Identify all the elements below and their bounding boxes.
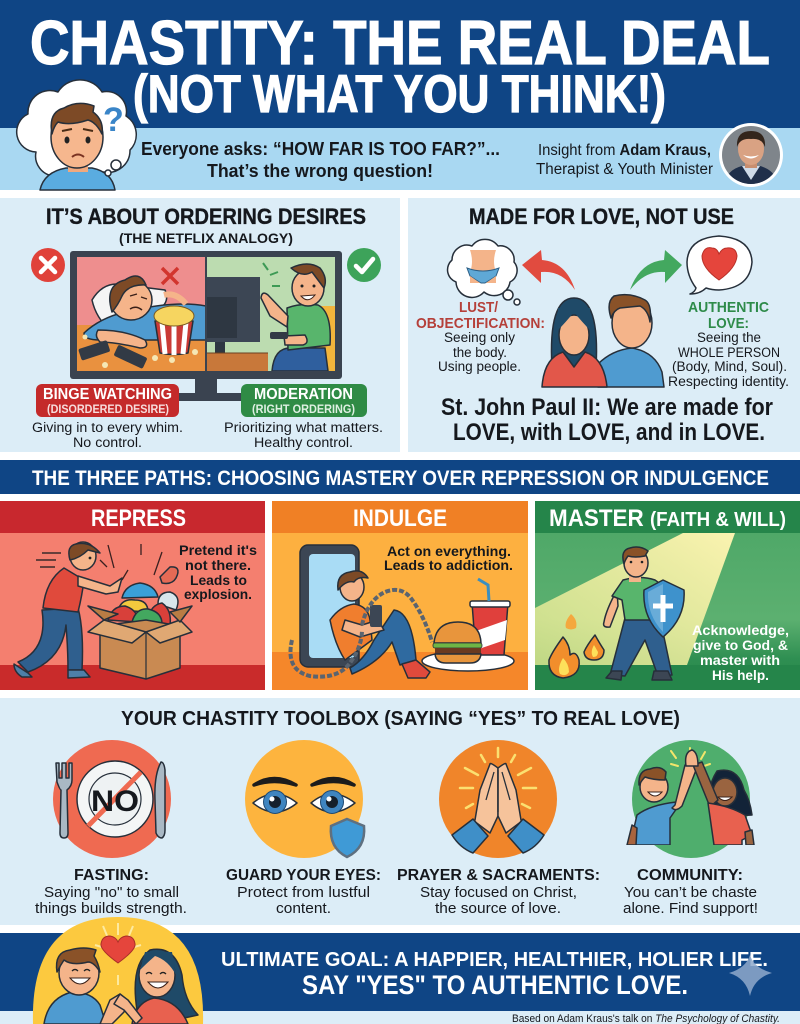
- icon: lust thought bubble: [448, 239, 520, 305]
- intro band: [0, 123, 800, 190]
- text: master caption: Acknowledge,: [692, 622, 789, 638]
- icon: no plate with fork and knife: NO: [91, 785, 139, 818]
- icon: eyes with shield: [245, 740, 364, 858]
- text: guard your eyes: [226, 867, 381, 917]
- text: fasting: [35, 867, 187, 917]
- text: repress caption: Leads to: [190, 572, 247, 588]
- arrow: toward love: [630, 250, 682, 290]
- icon: two friends high five: [627, 740, 754, 858]
- text: lust: [416, 299, 545, 374]
- speaker credit: Therapist & Youth Minister: [536, 161, 713, 178]
- binge watching scene: [77, 257, 206, 371]
- text: moderation caption: [224, 420, 383, 450]
- icon: love speech bubble: [687, 236, 752, 294]
- text: repress caption: Pretend it's: [179, 542, 257, 558]
- footer strip: [0, 1011, 800, 1024]
- panel: ordering desires: [0, 198, 400, 452]
- illustration: man with cross shield and flames: [549, 547, 684, 680]
- label: binge watching: BINGE WATCHING: [43, 386, 172, 403]
- text: prayer and sacraments: the source of love.: [435, 901, 561, 917]
- text: guard your eyes: GUARD YOUR EYES:: [226, 867, 381, 884]
- text: repress caption: not there.: [185, 557, 251, 573]
- text: guard your eyes: Protect from lustful: [237, 885, 370, 901]
- text: authentic love: WHOLE PERSON: [678, 345, 780, 360]
- banner: ultimate goal: [0, 933, 800, 1011]
- goal text: ULTIMATE GOAL: A HAPPIER, HEALTHIER, HOLIER LIFE.: [221, 949, 768, 971]
- text: fasting: things builds strength.: [35, 901, 187, 917]
- tool: prayer and sacraments: [397, 740, 600, 917]
- text: lust: LUST/: [459, 299, 499, 316]
- moderation scene: [206, 257, 335, 371]
- text: community: alone. Find support!: [623, 901, 758, 917]
- banner: three paths: [0, 460, 800, 494]
- icon: speaker portrait: [719, 123, 783, 187]
- text: repress caption: [179, 542, 257, 602]
- text: lust: Using people.: [438, 359, 521, 374]
- heading: made for love: MADE FOR LOVE, NOT USE: [469, 204, 734, 229]
- arrow: toward lust: [522, 250, 575, 290]
- tool: guard your eyes: [226, 740, 381, 917]
- text: prayer and sacraments: Stay focused on Christ,: [420, 885, 577, 901]
- speaker credit: Insight from Adam Kraus,: [538, 142, 711, 159]
- label: binge watching: [36, 384, 179, 417]
- text: fasting: FASTING:: [74, 867, 149, 884]
- label: moderation: (RIGHT ORDERING): [252, 404, 355, 416]
- text: indulge caption: [384, 543, 513, 573]
- text: binge caption: No control.: [73, 435, 142, 450]
- icon: red cross: [31, 248, 65, 282]
- panel: master: [535, 501, 800, 690]
- question text: Everyone asks: “HOW FAR IS TOO FAR?”...: [141, 139, 500, 159]
- text: community: [623, 867, 758, 917]
- text: master caption: give to God, &: [693, 637, 788, 653]
- speaker credit: [536, 142, 713, 178]
- text: binge caption: [32, 420, 183, 450]
- text: moderation caption: Prioritizing what matters.: [224, 420, 383, 435]
- text: prayer and sacraments: [397, 867, 600, 917]
- text: binge caption: Giving in to every whim.: [32, 420, 183, 435]
- text: community: COMMUNITY:: [637, 867, 743, 884]
- tool: fasting: [35, 740, 187, 917]
- text: community: You can’t be chaste: [624, 885, 757, 901]
- icon: green check: [347, 248, 381, 282]
- icon: confused boy in thought cloud: ?: [103, 101, 124, 139]
- label: moderation: [241, 384, 367, 417]
- question text: That’s the wrong question!: [207, 161, 433, 181]
- icon: no plate with fork and knife: [53, 740, 171, 858]
- text: lust: Seeing only: [444, 330, 515, 345]
- header banner: [0, 0, 800, 128]
- heading: master: MASTER (FAITH & WILL): [549, 505, 786, 532]
- text: master caption: His help.: [712, 667, 769, 683]
- label: binge watching: (DISORDERED DESIRE): [47, 404, 169, 416]
- panel: indulge: [272, 501, 528, 690]
- heading: indulge: INDULGE: [353, 505, 447, 532]
- text: authentic love: [668, 299, 789, 389]
- label: moderation: MODERATION: [254, 386, 353, 403]
- text: master caption: master with: [700, 652, 780, 668]
- text: indulge caption: Act on everything.: [387, 543, 511, 559]
- light beam: [535, 533, 735, 665]
- text: master caption: [692, 622, 789, 683]
- quote: [441, 394, 773, 446]
- subheading: netflix analogy: (THE NETFLIX ANALOGY): [119, 230, 293, 246]
- illustration: person forcing box shut: [14, 542, 192, 679]
- goal text: SAY "YES" TO AUTHENTIC LOVE.: [302, 970, 688, 1000]
- illustration: person chained to phone and junk food: [290, 545, 514, 678]
- title line 2: (NOT WHAT YOU THINK!): [133, 65, 666, 124]
- tool: community: [623, 740, 758, 917]
- heading: repress: REPRESS: [91, 505, 186, 532]
- text: authentic love: AUTHENTIC: [688, 299, 769, 316]
- text: authentic love: LOVE:: [708, 315, 749, 332]
- illustration: happy couple holding hands: [33, 917, 203, 1024]
- text: lust: the body.: [453, 345, 507, 360]
- text: indulge caption: Leads to addiction.: [384, 557, 513, 573]
- icon: confused boy in thought cloud: [17, 80, 136, 190]
- heading: toolbox: YOUR CHASTITY TOOLBOX (SAYING “YES” TO REAL LOVE): [121, 708, 680, 730]
- text: repress caption: explosion.: [184, 586, 252, 602]
- text: prayer and sacraments: PRAYER & SACRAMENTS:: [397, 867, 600, 884]
- text: guard your eyes: content.: [276, 901, 331, 917]
- icon: praying hands: [439, 740, 557, 858]
- television illustration: [70, 251, 342, 401]
- illustration: man and woman: [542, 295, 664, 387]
- text: authentic love: Respecting identity.: [668, 374, 789, 389]
- goal text: [221, 949, 768, 1000]
- text: fasting: Saying "no" to small: [44, 885, 179, 901]
- panel: chastity toolbox: [0, 698, 800, 925]
- heading: ordering desires: IT’S ABOUT ORDERING DESIRES: [46, 204, 366, 229]
- icon: sparkle star: [729, 955, 772, 996]
- panel: repress: [0, 501, 265, 690]
- text: authentic love: Seeing the: [697, 330, 761, 345]
- text: authentic love: (Body, Mind, Soul).: [672, 359, 787, 374]
- panel: made for love: [408, 198, 800, 452]
- question text: [141, 139, 500, 181]
- text: moderation caption: Healthy control.: [254, 435, 353, 450]
- text: lust: OBJECTIFICATION:: [416, 315, 545, 332]
